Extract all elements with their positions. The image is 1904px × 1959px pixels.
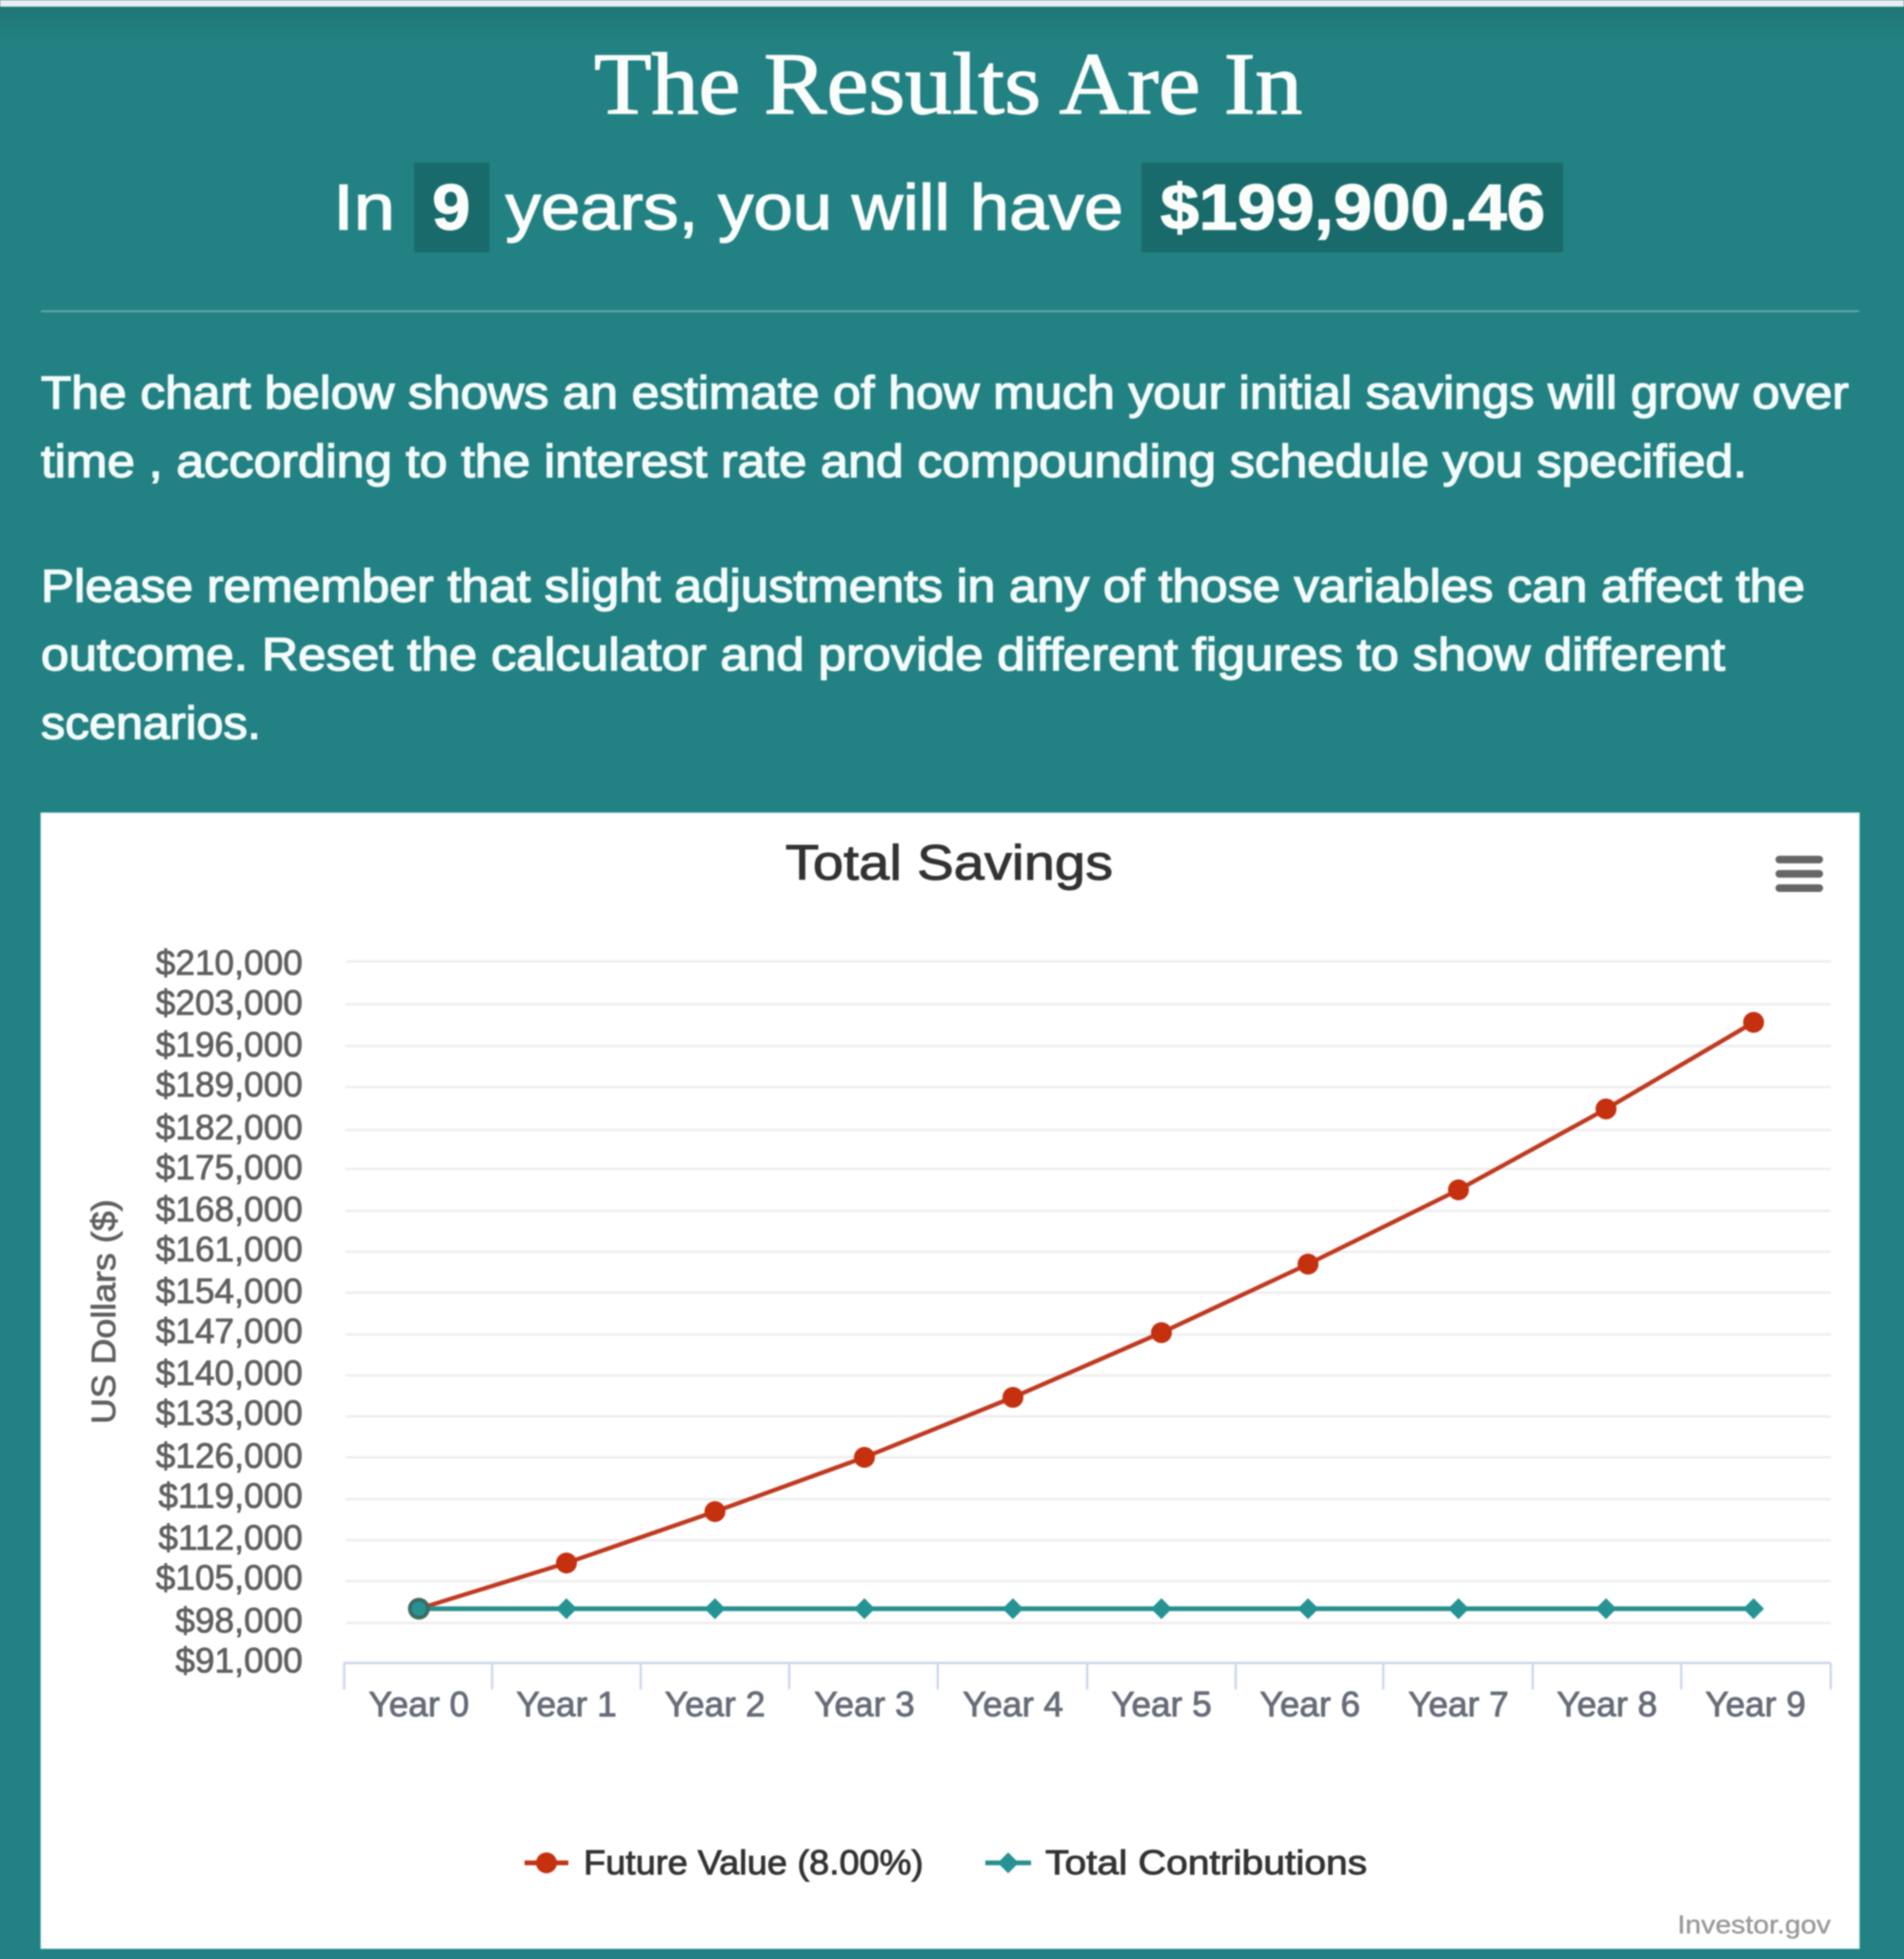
highlighted future value [1141, 163, 1563, 252]
x-axis labels [368, 1685, 1806, 1724]
paragraph: chart explanation [41, 368, 1849, 487]
paragraph: reminder: outcome. Reset the calculator and provide different figures to show different [41, 630, 1725, 681]
y-axis labels: $182,000 [156, 1108, 303, 1147]
x-axis line and ticks [344, 1663, 1831, 1690]
series: total contributions [407, 1597, 1764, 1620]
y-axis title: US Dollars ($) [86, 1199, 123, 1424]
credit: Investor.gov [1677, 1910, 1832, 1939]
legend item: future value: Future Value (8.00%) [584, 1843, 923, 1882]
y-axis labels: $98,000 [175, 1601, 303, 1640]
y-axis labels: $91,000 [175, 1641, 303, 1680]
chart title: Total Savings [785, 836, 1113, 891]
x-axis labels: Year 2 [664, 1685, 765, 1724]
paragraph: chart explanation: The chart below shows an estimate of how much your initial savings will grow over [41, 368, 1849, 419]
paragraph: reminder: Please remember that slight adjustments in any of those variables can affect the [41, 562, 1805, 612]
y-axis labels: $126,000 [156, 1436, 303, 1475]
y-axis labels: $112,000 [158, 1518, 303, 1557]
y-axis labels: $140,000 [156, 1354, 303, 1393]
y-axis labels: $210,000 [156, 943, 303, 982]
icon: hamburger menu [1775, 856, 1823, 892]
panel: chart [41, 813, 1859, 1949]
result summary line [333, 163, 1563, 252]
highlighted years value [414, 163, 489, 252]
y-axis labels: $168,000 [156, 1190, 303, 1229]
y-axis labels [156, 943, 303, 1680]
y-axis labels: $196,000 [156, 1025, 303, 1064]
x-axis labels: Year 9 [1705, 1685, 1806, 1724]
x-axis labels: Year 1 [516, 1685, 617, 1724]
legend item: total contributions: Total Contributions [1045, 1843, 1367, 1882]
x-axis labels: Year 8 [1557, 1685, 1657, 1724]
y-axis labels: $147,000 [156, 1312, 303, 1351]
paragraph: reminder: scenarios. [41, 699, 261, 749]
highlighted future value: $199,900.46 [1160, 171, 1545, 244]
x-axis labels: Year 6 [1259, 1685, 1360, 1724]
y-axis labels: $154,000 [156, 1272, 303, 1311]
paragraph: chart explanation: time , according to the interest rate and compounding schedule you specified. [41, 437, 1747, 487]
highlighted years value: 9 [432, 171, 470, 244]
title: The Results Are In [594, 35, 1302, 132]
x-axis labels: Year 7 [1408, 1685, 1509, 1724]
y-axis labels: $105,000 [156, 1558, 303, 1597]
x-axis labels: Year 5 [1111, 1685, 1212, 1724]
paragraph: reminder [41, 562, 1805, 749]
text: years, you will have: years, you will have [506, 171, 1123, 244]
series: future value [419, 1012, 1764, 1609]
x-axis labels: Year 4 [962, 1685, 1063, 1724]
y-axis labels: $161,000 [156, 1230, 303, 1269]
x-axis labels: Year 0 [368, 1685, 469, 1724]
y-axis labels: $203,000 [156, 983, 303, 1022]
x-axis labels: Year 3 [814, 1685, 915, 1724]
y-axis labels: $119,000 [158, 1476, 303, 1515]
y-axis labels: $175,000 [156, 1148, 303, 1187]
text: In: In [333, 171, 395, 244]
legend [525, 1843, 1367, 1882]
y-axis labels: $189,000 [156, 1065, 303, 1104]
y-axis labels: $133,000 [156, 1394, 303, 1433]
